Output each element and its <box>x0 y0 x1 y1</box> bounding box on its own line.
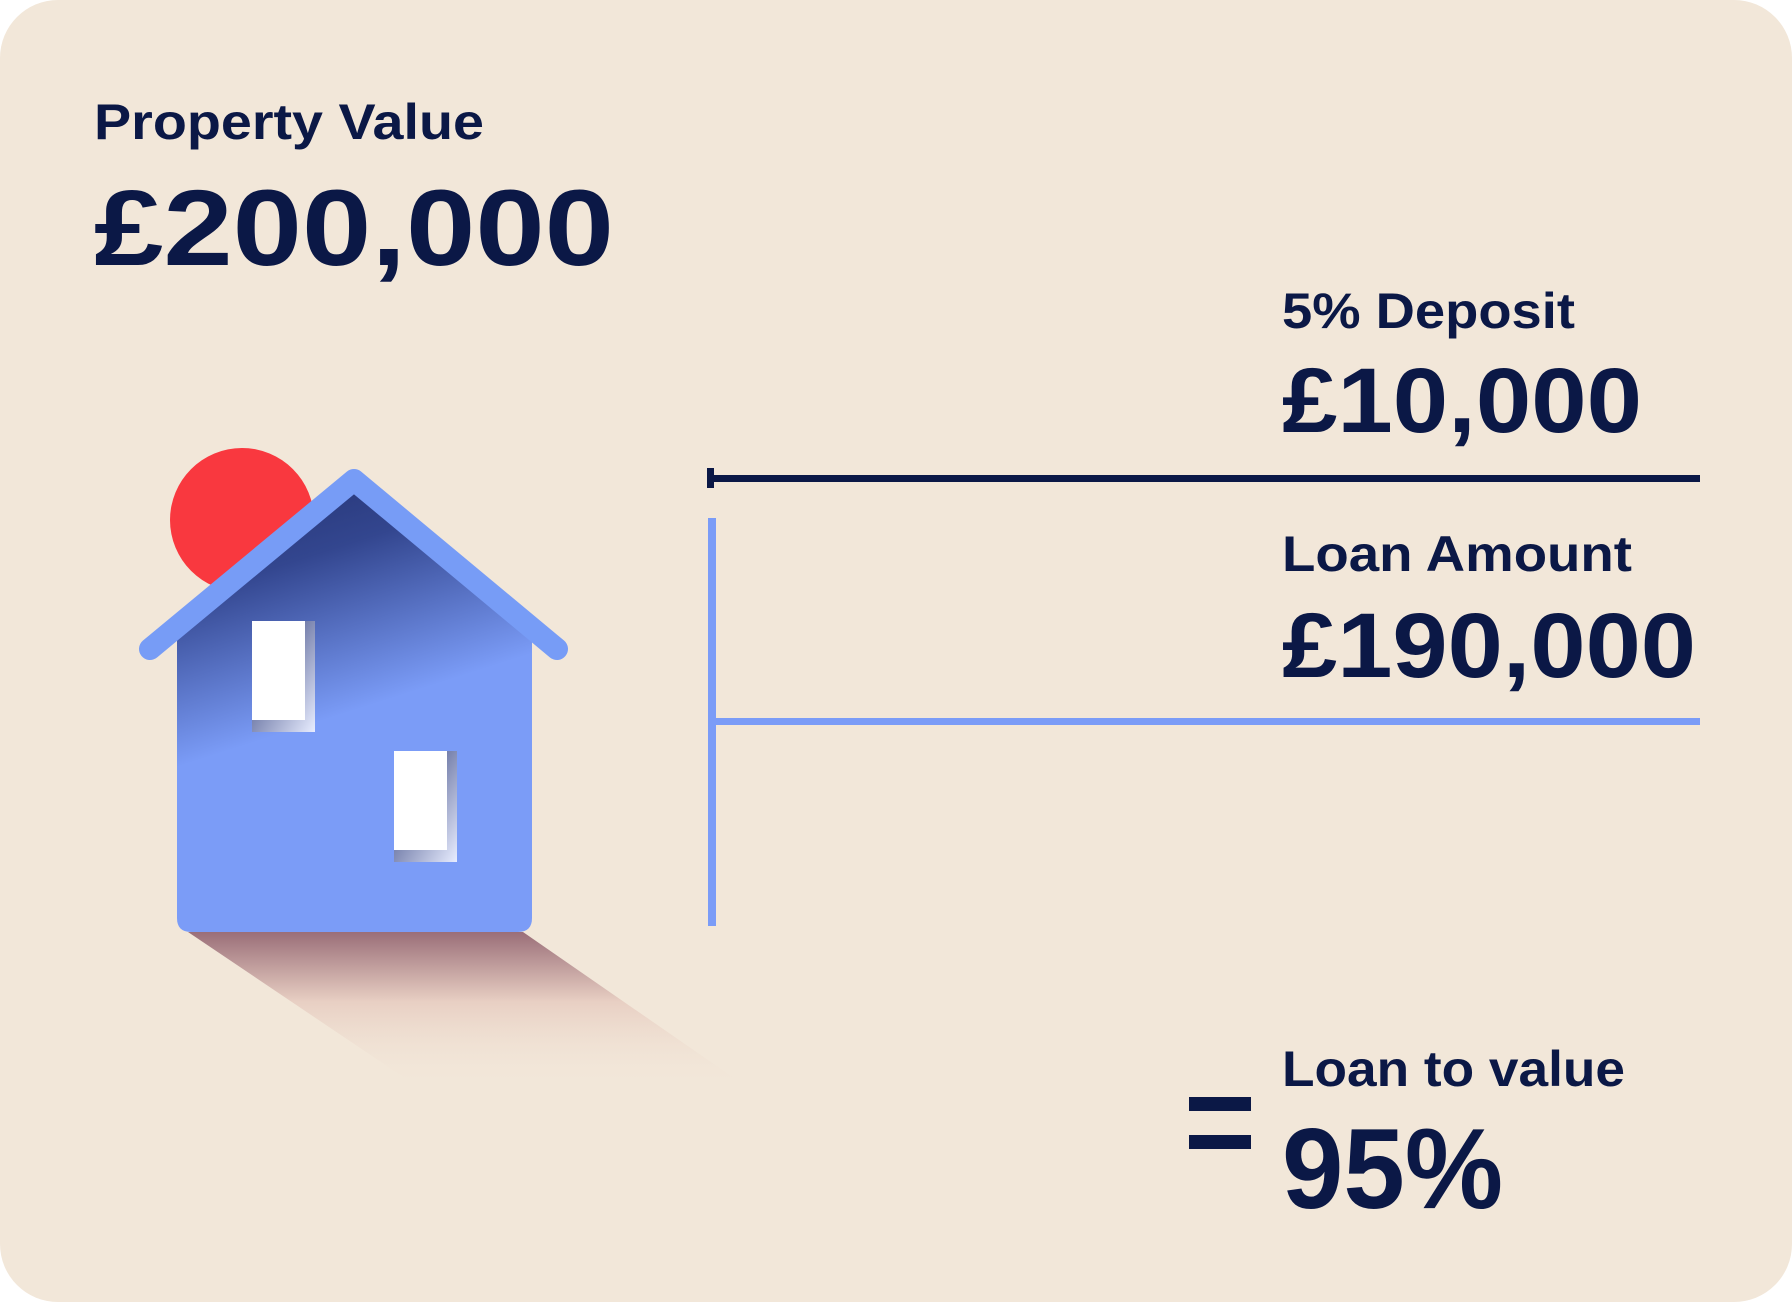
deposit text: £10,000 <box>1282 350 1642 452</box>
loan to value result: 95% <box>1282 1106 1503 1233</box>
loan bracket lines <box>708 518 1700 926</box>
roof <box>150 480 557 649</box>
loan to value result <box>1282 1041 1625 1233</box>
loan amount text: Loan Amount <box>1282 526 1632 582</box>
shadow <box>188 932 747 1087</box>
deposit text <box>1282 283 1642 452</box>
heading: property value <box>94 94 614 288</box>
icon: sun <box>170 448 314 592</box>
heading: property value: £200,000 <box>94 167 614 288</box>
loan to value result: Loan to value <box>1282 1041 1625 1097</box>
window 1 <box>252 621 315 732</box>
loan amount text: £190,000 <box>1282 595 1696 697</box>
equals sign <box>1189 1097 1251 1149</box>
deposit line <box>707 468 1700 488</box>
illustration: house <box>150 448 747 1087</box>
window 2 <box>394 751 457 862</box>
heading: property value: Property Value <box>94 94 484 150</box>
house body <box>177 478 532 932</box>
deposit text: 5% Deposit <box>1282 283 1575 339</box>
loan amount text <box>1282 526 1696 697</box>
